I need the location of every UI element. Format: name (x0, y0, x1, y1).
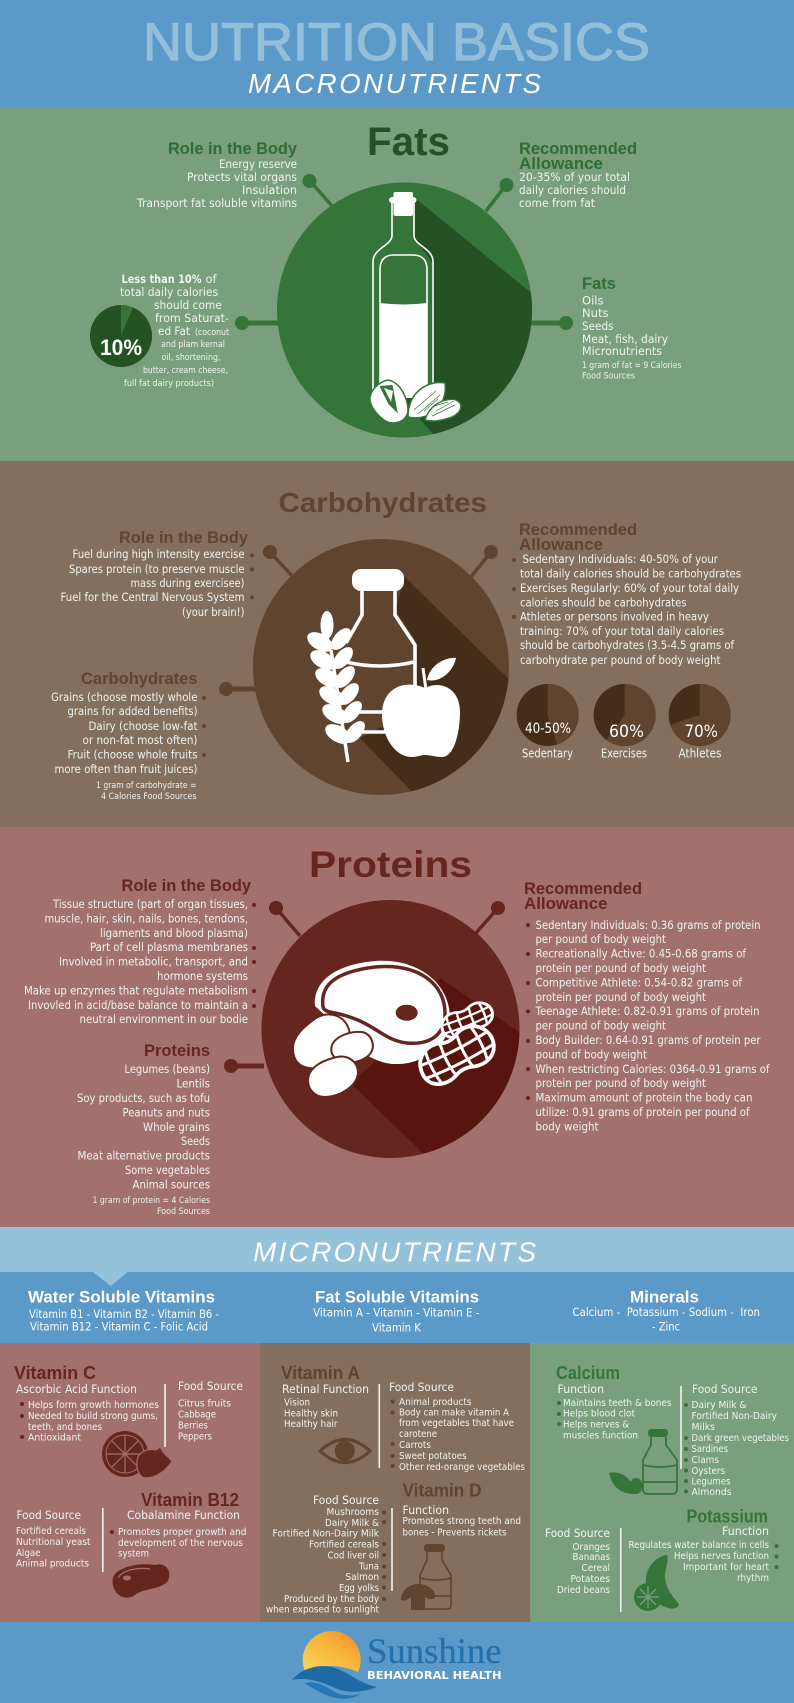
vitamin d food source: Dairy Milk & (325, 1518, 379, 1529)
panel: carbohydrates (0, 461, 794, 827)
vitamin c function: teeth, and bones (28, 1422, 102, 1433)
recommended allowance list: calories should be carbohydrates (520, 596, 686, 610)
calcium function: Maintains teeth & bones (563, 1398, 672, 1409)
saturated fat text: ed Fat (158, 324, 190, 338)
recommended allowance list: per pound of body weight (536, 932, 666, 946)
recommended allowance heading: Recommended (519, 521, 637, 539)
role in the body list: muscle, hair, skin, nails, bones, tendons, (44, 912, 248, 926)
proteins sources list: Peanuts and nuts (122, 1106, 210, 1120)
recommended allowance list: Competitive Athlete: 0.54-0.82 grams of (536, 976, 743, 990)
potassium function: Important for heart (683, 1562, 769, 1573)
panel: proteins (0, 827, 794, 1227)
proteins sources list: Whole grains (143, 1120, 210, 1134)
calcium food source: Clams (692, 1455, 719, 1466)
recommended allowance list: Body Builder: 0.64-0.91 grams of protein per (536, 1033, 761, 1047)
potassium food source: Food Source (545, 1526, 610, 1540)
vitamin c function: Helps form growth hormones (28, 1400, 159, 1411)
calcium function: Helps nerves & (563, 1420, 629, 1430)
potassium food source (545, 1526, 610, 1596)
vitamin d food source: Produced by the body (284, 1594, 379, 1605)
role in the body list (136, 157, 297, 210)
role in the body list: neutral environment in our bodie (80, 1012, 248, 1026)
vitamin b12 function: development of the nervous (118, 1538, 243, 1549)
role in the body list: mass during exercisee) (130, 576, 244, 590)
recommended allowance list: utilize: 0.91 grams of protein per pound of (536, 1105, 750, 1119)
pie: sedentary 40-50%: 40-50% (525, 721, 571, 737)
vitamin b12 function (110, 1508, 246, 1560)
divider line (378, 1384, 380, 1468)
vitamin a function (282, 1382, 369, 1430)
pie: sedentary 40-50%: Sedentary (522, 746, 573, 760)
category: minerals: - Zinc (652, 1320, 680, 1334)
category: water soluble vitamins: Vitamin B1 - Vitamin B2 - Vitamin B6 - (29, 1307, 219, 1321)
vitamin d food source: Egg yolks (339, 1583, 379, 1594)
vitamin b12 function: Cobalamine Function (127, 1508, 240, 1522)
proteins calorie note: Food Sources (157, 1207, 210, 1217)
recommended allowance heading (519, 140, 637, 173)
calcium food source: Food Source (692, 1382, 758, 1396)
recommended allowance list: per pound of body weight (536, 1018, 666, 1032)
pie: athletes 70% (669, 684, 731, 760)
role in the body list (60, 547, 254, 619)
heading: vitamin d: Vitamin D (402, 1480, 482, 1500)
role in the body list: Part of cell plasma membranes (90, 940, 248, 954)
connector lollipops (224, 901, 505, 1073)
vitamin a food source: Body can make vitamin A (399, 1408, 509, 1418)
calcium food source: Milks (692, 1422, 715, 1433)
heading: calcium: Calcium (556, 1363, 620, 1383)
recommended allowance heading: Allowance (519, 536, 603, 554)
category: water soluble vitamins: Vitamin B12 - Vitamin C - Folic Acid (30, 1320, 208, 1334)
recommended allowance text: daily calories should (519, 183, 626, 197)
vitamin c food source: Berries (178, 1420, 208, 1432)
recommended allowance heading: Recommended (524, 880, 642, 898)
divider line (102, 1508, 104, 1572)
fats sources list: Oils (582, 294, 604, 308)
recommended allowance text: come from fat (519, 196, 595, 210)
heading: carbohydrates: Carbohydrates (278, 487, 487, 518)
recommended allowance list: Maximum amount of protein the body can (536, 1090, 752, 1104)
icon: banana and lime (634, 1555, 679, 1611)
role in the body list: hormone systems (157, 969, 248, 983)
pie: exercises 60%: Exercises (601, 746, 647, 760)
role in the body list: Fuel during high intensity exercise (72, 547, 244, 561)
role in the body list: Spares protein (to preserve muscle (69, 562, 244, 576)
role in the body list: ligaments and blood plasma) (100, 926, 248, 940)
proteins sources list: Animal sources (132, 1178, 210, 1192)
calcium function: Function (558, 1382, 604, 1396)
icon: bottle, wheat and apple in circle (253, 539, 515, 800)
category: minerals: Minerals (630, 1288, 699, 1306)
band: micronutrient categories (0, 1272, 794, 1343)
header band (0, 0, 794, 108)
pie: exercises 60% (594, 684, 656, 760)
recommended allowance list: Exercises Regularly: 60% of your total daily (520, 581, 739, 595)
potassium food source: Bananas (572, 1552, 610, 1563)
recommended allowance text (519, 170, 630, 210)
proteins calorie note: 1 gram of protein = 4 Calories (92, 1196, 210, 1206)
recommended allowance heading: Allowance (519, 155, 603, 173)
calcium function (557, 1382, 672, 1442)
vitamin c food source: Food Source (178, 1379, 243, 1393)
calcium function: Helps blood clot (563, 1408, 635, 1420)
divider line (680, 1386, 682, 1469)
carbohydrates sources list: more often than fruit juices) (54, 762, 198, 776)
pie: athletes 70%: Athletes (678, 746, 722, 760)
vitamin a food source: Carrots (399, 1440, 431, 1451)
proteins sources list: Lentils (176, 1076, 210, 1090)
category: fat soluble vitamins: Vitamin A - Vitamin - Vitamin E - (313, 1306, 480, 1320)
role in the body heading: Role in the Body (168, 140, 298, 158)
recommended allowance heading (519, 521, 637, 554)
vitamin d food source: when exposed to sunlight (266, 1604, 379, 1616)
vitamin a function: Healthy hair (284, 1419, 338, 1430)
category: fat soluble vitamins (313, 1288, 480, 1334)
vitamin d function: Function (402, 1503, 449, 1517)
proteins sources heading: Proteins (144, 1042, 210, 1060)
vitamin a food source: Animal products (399, 1397, 472, 1408)
proteins calorie note (92, 1196, 210, 1217)
calcium food source: Dairy Milk & (692, 1400, 747, 1411)
saturated fat text: of (206, 272, 217, 286)
vitamin a function: Healthy skin (284, 1408, 338, 1420)
recommended allowance list: pound of body weight (536, 1048, 647, 1062)
recommended allowance list: body weight (536, 1120, 599, 1134)
vitamin b12 function: Promotes proper growth and (118, 1527, 246, 1538)
icon: bottle and mushroom (401, 1544, 451, 1610)
fats sources list (582, 294, 668, 358)
fats calorie note (582, 361, 682, 382)
carbohydrates sources list (51, 690, 206, 776)
saturated fat text: oil, shortening, (162, 353, 220, 363)
calcium food source: Oysters (692, 1466, 725, 1477)
saturated fat text: should come (154, 298, 222, 312)
icon: meat, beans and peanuts in circle (262, 900, 525, 1160)
recommended allowance text: 20-35% of your total (519, 170, 630, 184)
proteins sources list: Seeds (181, 1134, 210, 1148)
proteins sources list: Soy products, such as tofu (77, 1091, 210, 1105)
carbohydrates calorie note: 1 gram of carbohydrate = (96, 781, 196, 791)
potassium function: Function (722, 1524, 769, 1538)
logo: sunshine behavioral health: Sunshine (367, 1631, 502, 1671)
calcium function: muscles function (563, 1430, 638, 1442)
fats sources list: Nuts (582, 306, 608, 320)
vitamin a food source: Food Source (389, 1380, 454, 1394)
vitamin d function: Promotes strong teeth and (402, 1516, 521, 1527)
vitamin b12 food source (16, 1508, 91, 1570)
fats sources heading: Fats (582, 275, 616, 293)
category: minerals (572, 1288, 760, 1334)
potassium food source: Dried beans (557, 1585, 610, 1596)
saturated fat text: from Saturat- (155, 311, 229, 325)
vitamin c food source (178, 1379, 243, 1442)
recommended allowance list: Sedentary Individuals: 0.36 grams of protein (536, 918, 760, 932)
pie: exercises 60%: 60% (609, 722, 644, 742)
vitamin d function (402, 1503, 521, 1538)
panel: water soluble vitamins (0, 1343, 260, 1622)
connector lollipops (235, 174, 573, 330)
role in the body list: Tissue structure (part of organ tissues, (52, 897, 248, 911)
icon: citrus slice and strawberry (102, 1431, 172, 1478)
carbohydrates calorie note (96, 781, 197, 802)
carbohydrates sources list: Grains (choose mostly whole (51, 690, 198, 704)
role in the body list: Involved in metabolic, transport, and (59, 954, 248, 968)
icon: eye (320, 1440, 370, 1462)
potassium function: Regulates water balance in cells (628, 1540, 769, 1551)
category: fat soluble vitamins: Fat Soluble Vitamins (315, 1288, 479, 1306)
calcium food source: Almonds (692, 1487, 732, 1498)
pie: sedentary 40-50% (517, 684, 579, 760)
role in the body list: Make up enzymes that regulate metabolism (24, 984, 248, 998)
role in the body list: Protects vital organs (187, 170, 297, 184)
potassium function (628, 1524, 778, 1584)
recommended allowance list: protein per pound of body weight (536, 990, 706, 1004)
vitamin a function: Vision (284, 1398, 310, 1408)
category: fat soluble vitamins: Vitamin K (372, 1320, 421, 1334)
icon: olive oil bottle and nuts in circle (277, 182, 540, 445)
vitamin a food source: carotene (399, 1429, 437, 1440)
panel: fats (0, 108, 794, 461)
recommended allowance list: protein per pound of body weight (536, 961, 706, 975)
saturated fat text (120, 272, 230, 389)
vitamin c food source: Cabbage (178, 1410, 216, 1420)
potassium food source: Cereal (582, 1563, 610, 1574)
vitamin b12 food source: Food Source (16, 1508, 81, 1522)
fats calorie note: 1 gram of fat = 9 Calories (582, 361, 682, 371)
role in the body heading: Role in the Body (122, 877, 252, 895)
proteins sources list: Legumes (beans) (124, 1062, 210, 1076)
band: micronutrients title (0, 1227, 794, 1272)
recommended allowance list: training: 70% of your total daily calories (520, 624, 724, 638)
fats sources list: Micronutrients (582, 344, 662, 358)
calcium food source (684, 1382, 789, 1498)
recommended allowance heading: Recommended (519, 140, 637, 158)
recommended allowance list: total daily calories should be carbohydrates (520, 566, 741, 580)
heading: vitamin c: Vitamin C (14, 1363, 96, 1383)
saturated fat text: Less than 10% (122, 272, 202, 286)
vitamin c food source: Peppers (178, 1432, 212, 1442)
vitamin d function: bones - Prevents rickets (402, 1528, 506, 1538)
recommended allowance list: Recreationally Active: 0.45-0.68 grams of (536, 946, 747, 960)
calcium food source: Sardines (692, 1444, 728, 1455)
role in the body list: (your brain!) (182, 605, 244, 619)
vitamin c function: Antioxidant (28, 1432, 81, 1444)
role in the body list: Transport fat soluble vitamins (136, 196, 297, 210)
calcium food source: Fortified Non-Dairy (692, 1411, 777, 1422)
vitamin b12 function: system (118, 1548, 149, 1560)
potassium food source: Potatoes (570, 1574, 610, 1585)
carbohydrates sources list: or non-fat most often) (82, 733, 198, 747)
role in the body list (24, 897, 256, 1026)
carbohydrates sources heading: Carbohydrates (81, 670, 198, 688)
heading: potassium: Potassium (686, 1506, 768, 1526)
category: water soluble vitamins (28, 1288, 219, 1334)
divider line (164, 1384, 166, 1447)
potassium food source: Oranges (572, 1542, 610, 1553)
role in the body heading: Role in the Body (119, 529, 249, 547)
fats sources list: Meat, fish, dairy (582, 332, 668, 346)
vitamin a food source (389, 1380, 525, 1473)
fats calorie note: Food Sources (582, 372, 635, 382)
vitamin d food source: Tuna (358, 1562, 379, 1572)
proteins sources list (77, 1062, 210, 1192)
vitamin d food source: Salmon (346, 1572, 379, 1583)
recommended allowance list: Sedentary Individuals: 40-50% of your (522, 552, 718, 566)
vitamin c function: Needed to build strong gums, (28, 1411, 158, 1422)
logo: sunshine behavioral health (292, 1631, 502, 1699)
vitamin b12 food source: Fortified cereals (16, 1526, 86, 1537)
role in the body list: Invovled in acid/base balance to maintain a (28, 998, 248, 1012)
saturated fat text: (coconut (195, 328, 230, 338)
saturated fat text: full fat dairy products) (124, 379, 214, 389)
role in the body list: Energy reserve (219, 157, 297, 171)
vitamin a food source: from vegetables that have (399, 1418, 514, 1429)
divider line (620, 1528, 622, 1612)
pie: athletes 70%: 70% (684, 722, 718, 742)
icon: milk bottle and almonds (609, 1429, 677, 1494)
vitamin b12 food source: Nutritional yeast (16, 1537, 91, 1548)
category: water soluble vitamins: Water Soluble Vitamins (28, 1288, 215, 1306)
title: NUTRITION BASICS (143, 13, 650, 72)
panel: minerals (530, 1343, 794, 1622)
recommended allowance list (512, 552, 741, 667)
vitamin d food source: Food Source (313, 1493, 379, 1507)
vitamin c food source: Citrus fruits (178, 1398, 231, 1410)
vitamin d food source: Fortified Non-Dairy Milk (272, 1528, 379, 1540)
vitamin c function: Ascorbic Acid Function (16, 1382, 137, 1396)
recommended allowance list: protein per pound of body weight (536, 1076, 706, 1090)
saturated fat text: and plam kernal (161, 340, 225, 350)
vitamin c function (16, 1382, 159, 1444)
fats sources list: Seeds (582, 319, 614, 333)
vitamin d food source (266, 1493, 386, 1616)
panel: fat soluble vitamins (260, 1343, 530, 1622)
subtitle: micronutrients: MICRONUTRIENTS (253, 1236, 536, 1268)
vitamin d food source: Fortified cereals (309, 1540, 379, 1550)
carbohydrates calorie note: 4 Calories Food Sources (101, 792, 197, 802)
vitamin a food source: Sweet potatoes (399, 1451, 466, 1462)
carbohydrates sources list: Fruit (choose whole fruits (68, 748, 198, 762)
recommended allowance list: Teenage Athlete: 0.82-0.91 grams of protein (535, 1004, 760, 1018)
vitamin d food source: Cod liver oil (328, 1550, 379, 1562)
recommended allowance heading: Allowance (524, 895, 608, 913)
proteins sources list: Some vegetables (125, 1163, 210, 1177)
vitamin d food source: Mushrooms (326, 1507, 379, 1518)
footer band (0, 1622, 794, 1703)
saturated fat text: butter, cream cheese, (143, 366, 228, 376)
heading: vitamin a: Vitamin A (281, 1363, 360, 1383)
role in the body list: Fuel for the Central Nervous System (60, 590, 244, 604)
calcium food source: Legumes (692, 1476, 730, 1488)
role in the body list: Insulation (242, 183, 297, 197)
recommended allowance list: should be carbohydrates (3.5-4.5 grams of (520, 638, 735, 652)
recommended allowance list: Athletes or persons involved in heavy (520, 610, 709, 624)
heading: proteins: Proteins (309, 844, 472, 885)
saturated fat text: total daily calories (120, 285, 218, 299)
vitamin a food source: Other red-orange vegetables (399, 1462, 525, 1473)
icon: steak (113, 1564, 169, 1598)
recommended allowance list (526, 918, 770, 1134)
vitamin b12 food source: Algae (16, 1548, 40, 1559)
potassium function: rhythm (737, 1573, 769, 1584)
carbohydrates sources list: Dairy (choose low-fat (88, 719, 198, 733)
pie: 10 percent saturated fat (90, 305, 152, 367)
recommended allowance list: carbohydrate per pound of body weight (520, 653, 721, 667)
pointer triangle (93, 1272, 128, 1286)
recommended allowance heading (524, 880, 642, 913)
vitamin a function: Retinal Function (282, 1382, 369, 1396)
divider line (391, 1508, 393, 1591)
heading: vitamin b12: Vitamin B12 (141, 1490, 239, 1510)
vitamin b12 food source: Animal products (16, 1558, 89, 1570)
subtitle: macronutrients: MACRONUTRIENTS (248, 68, 542, 99)
potassium function: Helps nerves function (674, 1551, 769, 1562)
pie: 10 percent saturated fat: 10% (100, 335, 142, 360)
proteins sources list: Meat alternative products (78, 1148, 210, 1162)
logo: sunshine behavioral health: BEHAVIORAL HEALTH (367, 1670, 502, 1682)
connector lollipops (219, 545, 498, 696)
category: minerals: Calcium - Potassium - Sodium - Iron (572, 1305, 760, 1319)
heading: fats: Fats (367, 120, 450, 164)
carbohydrates sources list: grains for added benefits) (68, 704, 198, 718)
